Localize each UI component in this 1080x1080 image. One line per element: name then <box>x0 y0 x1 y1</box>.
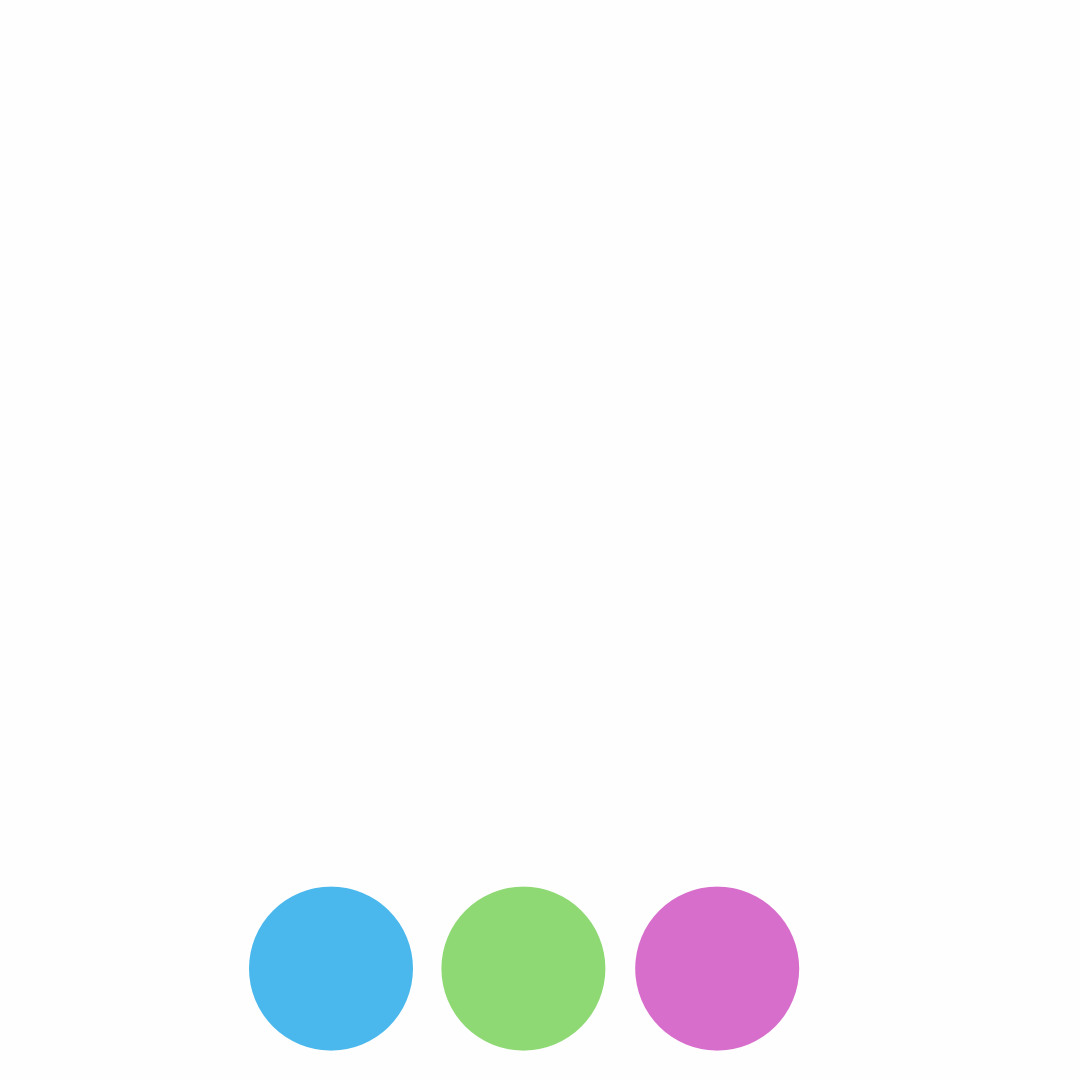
icon: pink circle <box>635 887 799 1051</box>
icon: blue circle <box>249 887 413 1051</box>
icon: green circle <box>441 887 605 1051</box>
